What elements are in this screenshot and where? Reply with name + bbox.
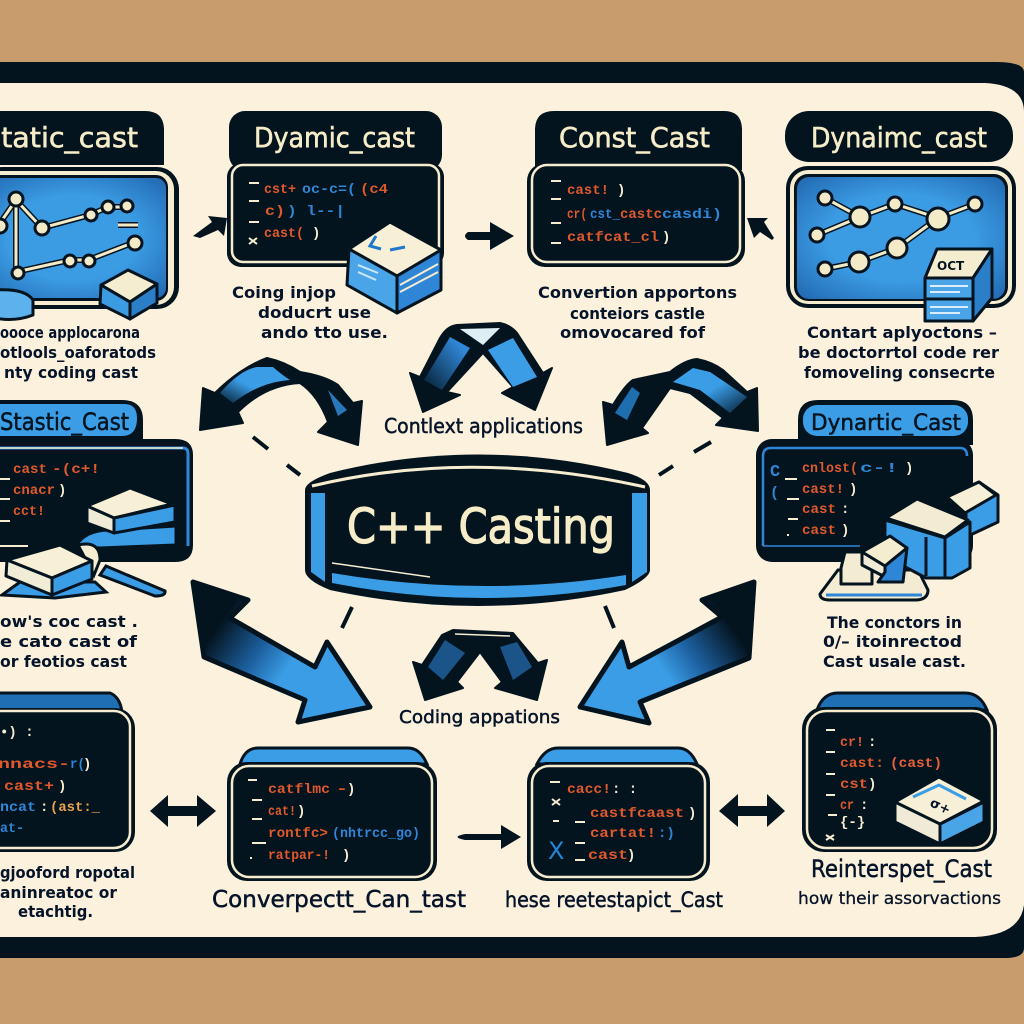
center badge: C++ Casting	[305, 454, 650, 606]
heading tab: Stastic_Cast	[0, 408, 129, 436]
caption: ando tto use.	[261, 323, 388, 342]
arrow: top center small	[465, 222, 514, 250]
panel: dynartic_cast middle right	[756, 400, 998, 671]
heading tab: Dynaimc_cast	[811, 121, 987, 154]
code window: c)	[265, 204, 285, 220]
code window: )	[849, 482, 857, 498]
text: context applications: Contlext applications	[384, 414, 583, 438]
heading tab: Dynartic_Cast	[811, 411, 961, 436]
icon: oct box	[925, 249, 992, 321]
code window: -(c+!	[52, 462, 100, 478]
code window: )	[905, 461, 913, 477]
caption: ow's coc cast .	[0, 612, 138, 631]
caption: oooce applocarona	[0, 323, 140, 342]
code window	[227, 762, 437, 881]
code window: )	[83, 757, 91, 773]
panel: dynaimc_cast top right	[785, 111, 1016, 382]
caption	[798, 855, 1001, 909]
code window: ) l--|	[287, 204, 345, 220]
caption	[538, 283, 737, 342]
code window: (	[770, 485, 779, 502]
code window: catfcat_cl	[567, 230, 659, 246]
heading tab: Const_Cast	[559, 121, 710, 154]
heading tab	[0, 111, 164, 165]
code window: cst_	[590, 207, 621, 223]
icon: box	[895, 777, 984, 844]
arrow: curved top right	[603, 359, 758, 445]
code window	[0, 708, 135, 852]
panel: converpectt_can_tast	[212, 748, 466, 913]
code window: X	[548, 837, 564, 865]
code window: C	[770, 463, 780, 482]
code window: cast(	[264, 226, 304, 242]
arrow: double left	[150, 795, 216, 827]
code window: cnacr	[13, 483, 55, 499]
code window	[756, 439, 973, 562]
heading tab	[229, 111, 442, 171]
code window: (ast:_	[50, 800, 101, 816]
caption: or feotios cast	[0, 652, 127, 671]
icon: box stack on laptop	[820, 482, 998, 600]
caption: e cato cast of	[0, 632, 138, 651]
code window: cst+	[264, 182, 296, 198]
panel: static_cast top left	[0, 111, 179, 382]
code window: casdi)	[662, 207, 722, 223]
window cap	[817, 693, 987, 710]
code window: )	[297, 804, 305, 820]
icon: upper block	[76, 488, 176, 548]
code window: )	[688, 806, 696, 822]
code window: : :	[612, 782, 637, 798]
code window: (c4	[360, 182, 388, 198]
code window: )	[662, 230, 670, 246]
title: C++ Casting	[347, 499, 615, 555]
code window: cr	[840, 798, 854, 814]
code window: catflmc	[268, 782, 330, 798]
code window	[227, 163, 444, 267]
code window: ncat	[0, 800, 36, 816]
caption: etachtig.	[18, 902, 93, 921]
code window: )	[342, 848, 350, 864]
arrow: top left small	[193, 216, 227, 238]
heading tab: Dyamic_cast	[254, 121, 415, 154]
icon: oct box: OCT	[937, 259, 965, 273]
heading tab	[785, 111, 1013, 162]
panel: reetestapict_cast	[505, 748, 723, 913]
code window: (nhtrcc_go)	[332, 826, 420, 842]
caption: omovocared fof	[560, 323, 706, 342]
code window: cr(	[567, 207, 587, 223]
icon: box: σ+	[927, 796, 953, 818]
code window: cacc!	[567, 782, 611, 798]
panel: const_cast top	[527, 111, 745, 342]
caption	[0, 863, 135, 921]
panel: dyamic_cast top	[227, 111, 444, 342]
panel: reinterspet_cast	[798, 693, 1001, 909]
code window: r(	[70, 757, 85, 773]
caption: 0/– itoinrectod	[823, 632, 962, 651]
code window: cast	[802, 502, 836, 518]
code window: cr!	[840, 735, 864, 751]
caption: Cast usale cast.	[823, 652, 966, 671]
caption: gjooford ropotal	[0, 863, 135, 882]
code window: :	[868, 735, 876, 751]
arrow: large lower left	[193, 582, 370, 722]
caption: Coing injop	[232, 283, 336, 302]
caption: hese reetestapict_Cast	[505, 888, 723, 913]
code window: cast	[802, 523, 836, 539]
code window: cast	[13, 462, 47, 478]
code window: cct!	[13, 504, 45, 520]
caption: conteiors castle	[570, 304, 705, 323]
icon: disc	[0, 290, 33, 319]
caption: otlools_oaforatods	[0, 343, 156, 362]
code window: cast!	[567, 183, 609, 199]
arrow: curved top left	[200, 358, 362, 445]
caption: nty coding cast	[4, 363, 138, 382]
dashed connectors	[253, 437, 711, 628]
code window: {-}	[840, 815, 865, 831]
code window: cast	[588, 848, 628, 864]
code window: )	[841, 523, 849, 539]
arrow: double right	[719, 794, 785, 827]
caption: The conctors in	[827, 613, 962, 632]
panel: lower left code	[0, 693, 135, 921]
caption	[0, 612, 138, 671]
icon: cube	[100, 270, 157, 319]
code window: -	[336, 782, 348, 798]
caption: Convertion apportons	[538, 283, 737, 302]
code window: (cast)	[890, 756, 942, 772]
window cap	[0, 693, 122, 712]
code window: :)	[658, 826, 675, 842]
caption: Converpectt_Can_tast	[212, 887, 466, 913]
arrow: top right small	[747, 218, 774, 240]
arrow: large lower right	[580, 582, 754, 723]
code window: castc	[620, 207, 662, 223]
panel: static_cast middle left	[0, 400, 193, 671]
code window: )	[868, 777, 876, 793]
code window: cnlost(	[802, 461, 858, 477]
code window: )	[312, 226, 320, 242]
caption: fomoveling consecrte	[804, 363, 995, 382]
code window: )	[58, 779, 66, 795]
code window: cst	[840, 777, 868, 793]
caption: doducrt use	[258, 303, 371, 322]
code window: cast!	[802, 482, 844, 498]
code window	[0, 439, 193, 562]
caption: Reinterspet_Cast	[811, 855, 992, 883]
code window: rontfc>	[268, 826, 328, 842]
code window: )	[617, 183, 625, 199]
text: coding applications: Coding appations	[399, 707, 560, 728]
heading tab	[798, 400, 973, 445]
heading tab	[535, 111, 742, 170]
code window: cat!	[268, 804, 296, 820]
code window: at-	[0, 821, 24, 837]
arrow: curved lower center	[413, 630, 547, 700]
caption: aninreatoc or	[0, 883, 117, 902]
heading tab	[0, 400, 143, 445]
code window: cartat!	[590, 826, 656, 842]
code window: c-!	[860, 461, 898, 477]
caption	[798, 323, 999, 382]
arrow: single bottom center	[458, 825, 521, 849]
window cap	[240, 748, 427, 764]
caption: be doctorrtol code rer	[798, 343, 999, 362]
caption	[823, 613, 966, 671]
blue diagram screen	[786, 166, 1016, 308]
code window: :	[40, 800, 48, 816]
icon: lower block	[2, 544, 165, 598]
code window	[527, 762, 710, 881]
icon: box	[347, 222, 441, 313]
code window: oc-c=(	[302, 182, 356, 198]
code window: cast:	[840, 756, 884, 772]
code window: ratpar-!	[268, 848, 330, 864]
caption: how their assorvactions	[798, 889, 1001, 909]
caption: Contart aplyoctons –	[807, 323, 997, 342]
code window: cast+	[4, 779, 54, 795]
blue diagram screen	[0, 167, 179, 309]
caption	[0, 323, 156, 382]
code window: •) :	[0, 725, 34, 741]
window cap	[537, 748, 697, 764]
code window: :	[860, 798, 868, 814]
arrow: curved top center	[410, 323, 552, 412]
code window: )	[58, 483, 66, 499]
code window	[802, 707, 997, 852]
code window: castfcaast	[590, 806, 684, 822]
code window	[527, 163, 745, 267]
caption	[232, 283, 388, 342]
code window: :	[841, 502, 849, 518]
code window: )	[347, 782, 355, 798]
code window: )	[627, 848, 635, 864]
